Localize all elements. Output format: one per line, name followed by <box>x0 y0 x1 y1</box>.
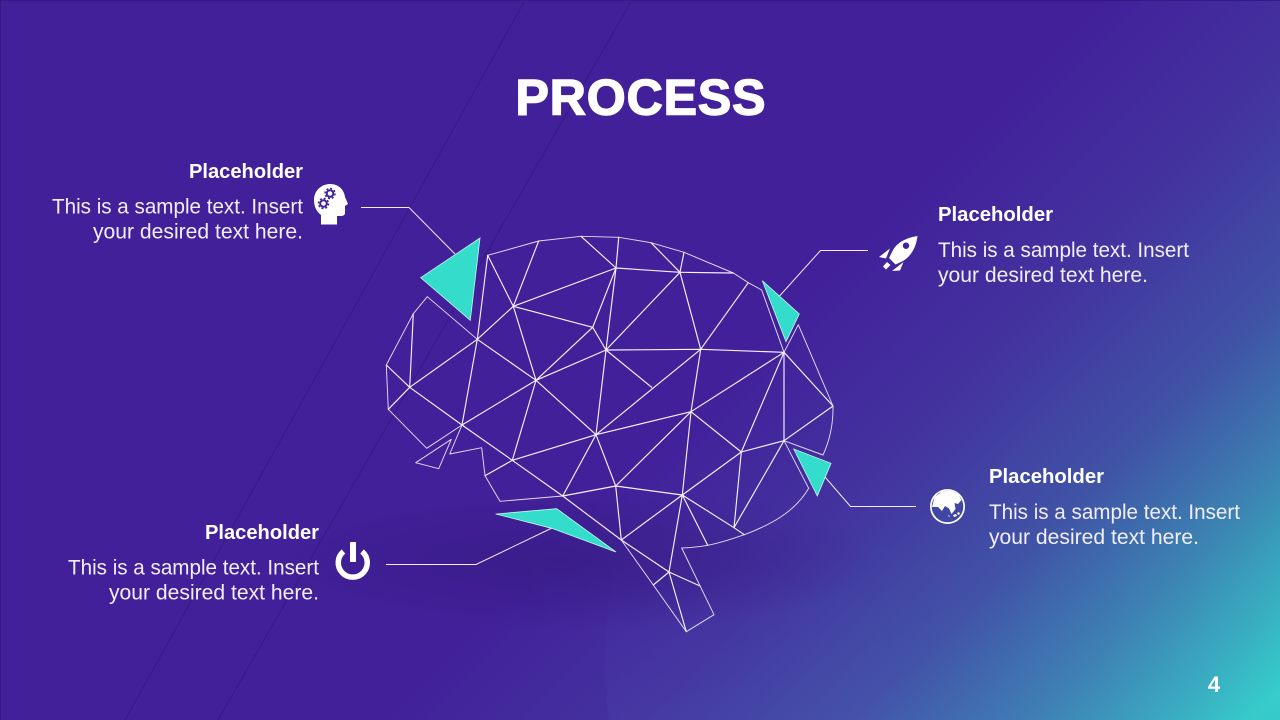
text block: top right <box>938 239 1189 287</box>
leader lines <box>361 208 916 564</box>
teal triangle: bottom right <box>794 449 831 496</box>
text block: bottom left <box>68 556 319 604</box>
teal triangle: bottom left <box>496 509 616 552</box>
icon: power button <box>338 542 367 577</box>
callout: bottom left <box>68 521 367 604</box>
icon: head with gears <box>314 184 348 224</box>
text block: top right: your desired text here. <box>938 264 1148 287</box>
text block: bottom left: your desired text here. <box>109 582 319 604</box>
icon: rocket <box>879 236 918 271</box>
heading: bottom right: Placeholder <box>989 465 1104 488</box>
brain wireframe <box>386 236 833 632</box>
text block: bottom right: your desired text here. <box>989 526 1199 549</box>
heading: top right: Placeholder <box>938 203 1053 226</box>
brain outline <box>386 236 833 632</box>
icon: globe <box>930 489 965 524</box>
teal triangle: top right <box>762 281 799 342</box>
text block: top left: This is a sample text. Insert <box>52 196 303 218</box>
callout: top left <box>52 160 348 244</box>
text block: top left <box>52 196 303 244</box>
callout: bottom right <box>930 465 1240 549</box>
callout: top right <box>879 203 1189 287</box>
page number: 4 <box>1208 672 1221 697</box>
title: PROCESS <box>516 70 766 126</box>
heading: top left: Placeholder <box>189 160 303 183</box>
text block: bottom left: This is a sample text. Insert <box>68 556 319 580</box>
text block: bottom right: This is a sample text. Insert <box>989 501 1240 524</box>
brain mesh <box>462 255 488 425</box>
heading: bottom left: Placeholder <box>205 521 319 544</box>
text block: top left: your desired text here. <box>93 220 303 244</box>
text block: top right: This is a sample text. Insert <box>938 239 1189 262</box>
teal triangle: top left <box>421 238 480 320</box>
text block: bottom right <box>989 501 1240 549</box>
